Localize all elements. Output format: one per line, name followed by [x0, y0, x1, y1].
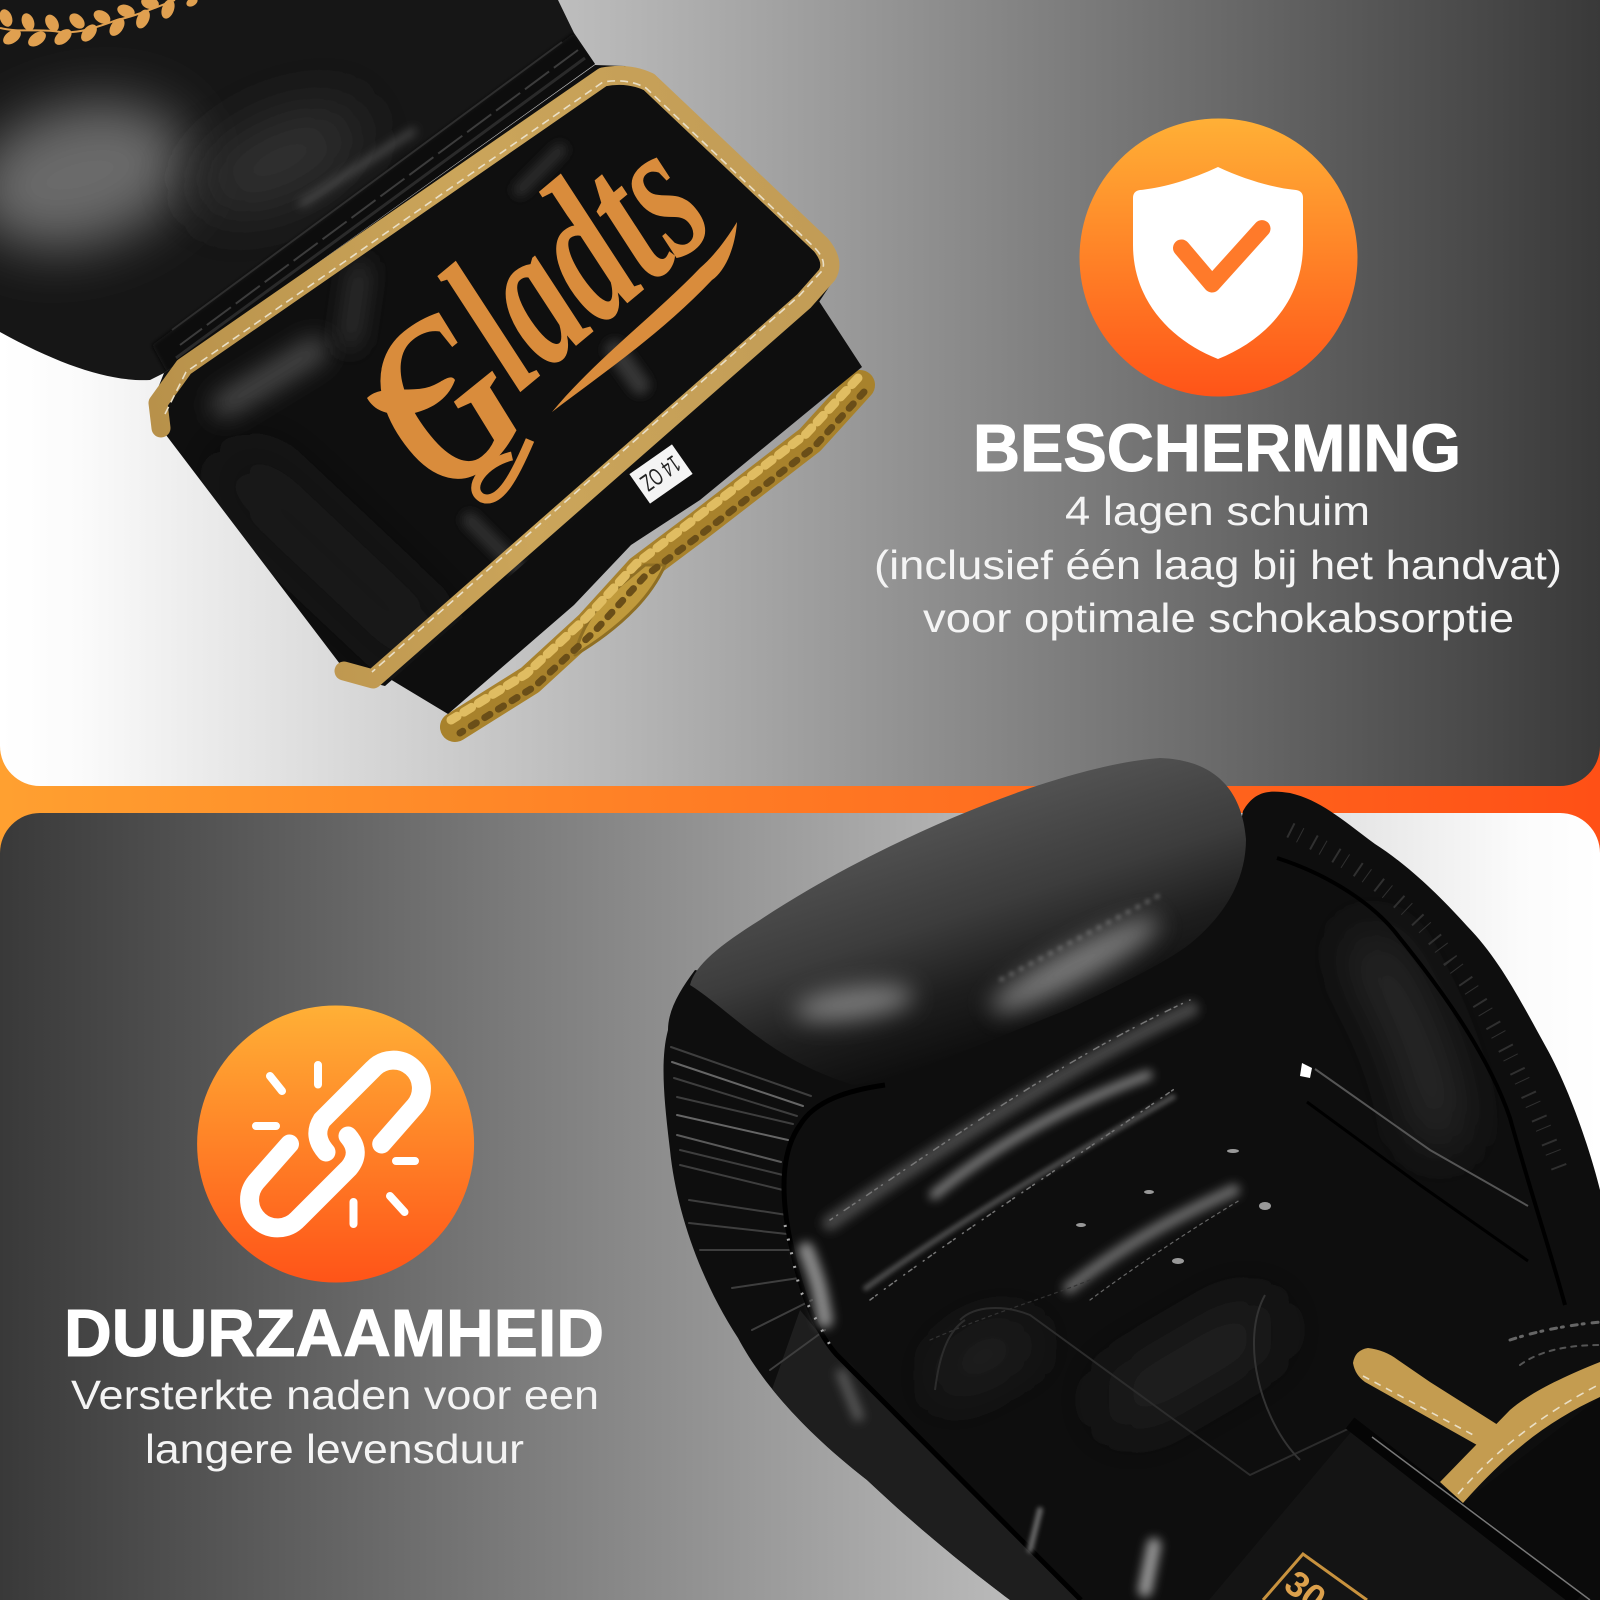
black back strap: [375, 295, 862, 714]
glove body: [0, 0, 595, 380]
text block: bescherming description: (inclusief één laag bij het handvat): [874, 542, 1562, 588]
text block: duurzaamheid description: [71, 1372, 599, 1472]
wristband gloss: [225, 150, 640, 640]
gold trim stitching: [1458, 1384, 1600, 1494]
text block: bescherming description: [874, 488, 1562, 641]
stitch dots: [1076, 1149, 1271, 1264]
wrist panel: [1209, 1426, 1577, 1600]
palm seams: [935, 1069, 1528, 1475]
wrist seam: [1350, 1423, 1577, 1600]
palm body: [664, 792, 1600, 1600]
crinkle lines: [830, 1000, 1190, 1220]
gold tab stitching: [1363, 1376, 1477, 1437]
right rim stitching: [1277, 858, 1565, 1305]
palm gloss: [806, 950, 1600, 1590]
inner palm edge: [784, 1085, 1081, 1600]
logo word: ladts: [402, 87, 748, 429]
logo capital: G: [312, 262, 570, 541]
wristband panel: [152, 65, 837, 686]
palm details: [671, 830, 1600, 1600]
gold trim: [1440, 1362, 1600, 1503]
body leather highlights: [0, 33, 600, 378]
knuckle gathers: [671, 1047, 825, 1370]
heading: bescherming: BESCHERMING: [973, 411, 1461, 486]
logo underline: [552, 222, 737, 412]
gold trim: [158, 75, 830, 679]
gold lace: [451, 378, 864, 733]
glove: open palm close-up: [664, 758, 1600, 1600]
icon: broken chain link: [197, 1006, 474, 1282]
logo tail: [476, 440, 530, 499]
panel: bottom gradient background: [0, 813, 1600, 1600]
size label: 14 OZ: [635, 450, 685, 496]
text block: bescherming description: voor optimale schokabsorptie: [923, 595, 1514, 641]
glove: wrist strap close-up: [0, 0, 864, 733]
embroidered logo: [312, 87, 748, 541]
text block: duurzaamheid description: Versterkte naden voor een: [71, 1372, 599, 1418]
gold tab: [1353, 1348, 1498, 1445]
text block: bescherming description: 4 lagen schuim: [1065, 488, 1370, 534]
icon: shield with check: [1080, 118, 1358, 396]
lower-left sheen: [840, 1370, 860, 1420]
inner edge dots: [785, 1225, 830, 1345]
thumb pad: [690, 758, 1246, 1085]
cuff roll: [152, 33, 600, 378]
wrist right panel: [1463, 1397, 1600, 1600]
trim stitching: [165, 81, 823, 672]
size label: [629, 444, 693, 504]
orange background band: [0, 740, 1600, 860]
heading: duurzaamheid: DUURZAAMHEID: [64, 1296, 604, 1371]
lower-left flat leather: [770, 1310, 1081, 1600]
thumb gloss: [792, 895, 1167, 1027]
panel: top gradient background: [0, 0, 1600, 786]
logo swash: [367, 377, 455, 414]
lining hole: [1300, 1063, 1312, 1078]
text block: duurzaamheid description: langere levensduur: [145, 1426, 524, 1472]
wreath embroidery: [0, 0, 199, 50]
size badge: [1263, 1554, 1367, 1600]
